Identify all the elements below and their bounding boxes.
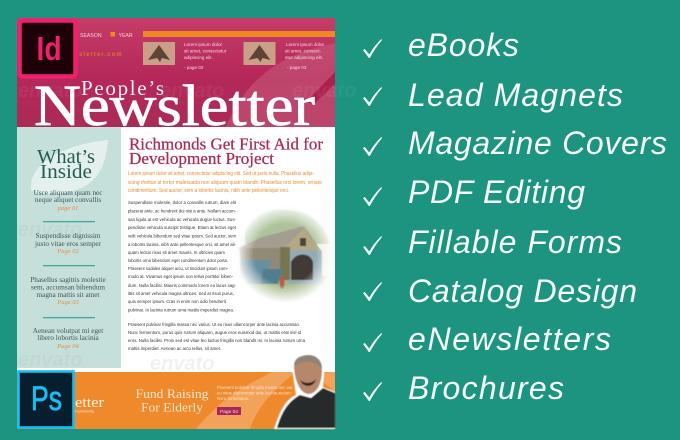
item: Brochures: Brochures xyxy=(408,370,564,406)
article headline: Development Project xyxy=(129,149,274,168)
article body column: san ligula at est vehicula ac vehicula augue luctus. Sus- xyxy=(128,217,236,222)
photo: smiling elderly man xyxy=(274,353,335,429)
footer blurb: Praesent pulvinar fringilla massa nec var. xyxy=(217,385,293,390)
footer headline: For Elderly xyxy=(141,400,204,414)
services checklist xyxy=(363,27,667,406)
footer blurb: eu risus ullamcorper ante lacinia accum xyxy=(217,390,291,396)
thumbnail text 2 xyxy=(285,42,325,70)
article body column: quam lectus risus sit amet mauris. In ultricies quam xyxy=(128,250,225,255)
footer blurb: Nunc fermentum. xyxy=(217,396,249,401)
icon: InDesign badge: Id xyxy=(36,30,62,67)
contents item 1: page 01 xyxy=(57,205,78,212)
article body column: pulvinar. In lacinia rutrum urna mattis imperdiet magna. xyxy=(128,308,234,312)
thumbnail 1 xyxy=(143,42,175,65)
icon: Photoshop badge xyxy=(18,372,74,428)
contents item 2: Page 02 xyxy=(56,248,79,255)
thumbnail text 1: sit amet, consectetur xyxy=(184,48,227,54)
contents item 3: Phasellus sagittis molestie xyxy=(30,276,106,284)
article body column: Suspendisse molestie, dolor a convallis rutrum, diam elit xyxy=(128,200,237,205)
thumbnail 2 xyxy=(244,42,276,65)
thumbnail text 1: Lorem ipsum dolor xyxy=(184,42,223,47)
watermark text on page: envato xyxy=(150,353,214,375)
article body column: placerat ante, ac hendrerit dui nisi a ante. Nullam accum- xyxy=(128,208,236,214)
article body column: modo at. Vivamus eget ipsum non tellus porttitor biben- xyxy=(128,274,233,279)
thumbnail text 2: sit amet, consect- xyxy=(285,48,321,54)
article body column: lobortis urna bibendum eget condimentum dolor porta. xyxy=(128,258,228,263)
watermark text in sidebar: envato xyxy=(18,219,82,241)
contents item 2: justo vitae eros semper xyxy=(34,240,102,248)
masthead subtitle: People’s xyxy=(81,76,164,100)
contents item 3: magna mattis sit amet xyxy=(37,291,99,299)
watermark text in masthead: envato xyxy=(292,80,356,102)
page tag xyxy=(217,407,241,415)
article body column: dum. Nulla facilisi. Mauris commodo lorem eu lacus sag- xyxy=(128,283,236,288)
contents item 2: Suspendisse dignissim xyxy=(36,232,101,240)
sidebar heading xyxy=(37,147,95,183)
season and year label xyxy=(80,32,133,39)
item: eBooks: eBooks xyxy=(408,27,519,63)
season and year label: YEAR xyxy=(118,33,133,39)
article closing paragraph: Praesent pulvinar fringilla massa nec varius. Ut eu risus ullamcorper ante lacinia accumsan. xyxy=(128,322,300,327)
item: Fillable Forms: Fillable Forms xyxy=(408,224,622,260)
article closing paragraph: mattis imperdiet. Aenean ac arcu tellus, sit amet. xyxy=(128,346,221,351)
thumbnail text 1: - page 02 xyxy=(184,65,204,70)
thumbnail text 1 xyxy=(184,42,227,70)
article body column: a lobortis lacinia, nibh ante pellentesque orci, sit amet ali- xyxy=(128,242,236,247)
article intro: condimentum. Sed auctor, sem a lobortis lacinia, nibh ante pellentesque orci. xyxy=(128,188,289,194)
icon: InDesign badge xyxy=(20,20,76,76)
footer headline xyxy=(136,386,209,414)
article body column: Praesent sodales aliquet arcu, ut tincidunt ipsum com- xyxy=(128,266,228,271)
icon: Photoshop badge: Ps xyxy=(31,380,62,418)
watermark text in masthead: envato xyxy=(160,80,224,102)
article body column: quis semper ipsum. Cras in enim non odio hendrerit xyxy=(128,299,227,304)
item: PDF Editing: PDF Editing xyxy=(408,174,585,210)
footer headline: Fund Raising xyxy=(136,386,209,401)
item: Magazine Covers: Magazine Covers xyxy=(408,125,667,161)
panel: orange footer banner xyxy=(17,372,335,429)
article headline xyxy=(129,134,323,168)
article body column: ittis sit amet vehicula magna ultrices. Sed at risus purus, xyxy=(128,291,234,296)
article headline: Richmonds Get First Aid for xyxy=(129,134,323,154)
article body column: pendisse vehicula suscipit tristique. Etiam at lectus eget xyxy=(128,225,237,230)
orange rule xyxy=(143,31,335,37)
article body column xyxy=(128,200,237,312)
item: eNewsletters: eNewsletters xyxy=(408,321,611,357)
masthead title: Newsletter xyxy=(34,73,315,138)
contents item 3 xyxy=(30,276,106,306)
panel: newsletter page xyxy=(17,18,356,429)
contents item 2 xyxy=(34,232,102,255)
item: Catalog Design: Catalog Design xyxy=(408,273,637,309)
item: Lead Magnets: Lead Magnets xyxy=(408,77,623,113)
contents item 1 xyxy=(34,189,102,212)
article intro xyxy=(128,171,322,194)
sidebar heading: What’s xyxy=(37,147,95,168)
footer masthead fragment: etter xyxy=(75,395,104,411)
article body column: velit vehicula bibendum sed vitae ipsum. Sed auctor, sem xyxy=(128,234,236,238)
article intro: scing rhettus at tortor malesuada non aliquam quam blandit. Phasellus orci lorem, ornare xyxy=(128,180,322,186)
thumbnail text 2: Lorem ipsum dolor xyxy=(286,42,325,47)
watermark text in sidebar xyxy=(18,219,82,371)
contents item 4 xyxy=(33,327,103,350)
watermark text in masthead: envato xyxy=(18,80,82,102)
contents item 1: Usce aliquam quam nec xyxy=(34,189,102,197)
thumbnail text 1: adipiscing elit. xyxy=(184,55,213,60)
sidebar heading: Inside xyxy=(40,162,92,183)
footer blurb xyxy=(217,385,293,401)
article closing paragraph: eros. Nulla facilisi. Proin sed est vitae leo luctus fringilla non blandit mi. In lacinia rutrum urna xyxy=(128,338,305,343)
contents item 1: neque aliquet convallis xyxy=(35,196,101,204)
season and year label: SEASON xyxy=(80,33,102,39)
footer masthead fragment: Community xyxy=(75,410,94,414)
contents item 4: Page 04 xyxy=(56,343,79,350)
watermark text in sidebar: envato xyxy=(18,349,82,371)
article intro: Lorem ipsum dolor sit amet, consectetur adipiscing elit. Sed ut justo nulla. Phasellus adipi- xyxy=(128,171,314,177)
contents item 4: libero lobortis lacinia xyxy=(37,334,100,342)
contents item 3: sem, accumsan bibendum xyxy=(31,284,105,292)
panel: magenta masthead xyxy=(17,18,356,138)
page tag: Page 04 xyxy=(220,409,238,415)
article closing paragraph xyxy=(128,322,305,351)
photo: farmhouse xyxy=(238,209,330,302)
website text: sletter.com xyxy=(79,52,123,58)
contents item 4: Aenean volutpat mi eget xyxy=(33,327,103,335)
contents item 3: Page 03 xyxy=(56,299,79,306)
watermark text in masthead xyxy=(18,80,356,102)
thumbnail text 2: - page 03 xyxy=(287,65,307,70)
article closing paragraph: Nunc fermentum, purus quis rutrum aliquam, augue eros euismod dui, ut mattis erat nisl id xyxy=(128,330,301,335)
thumbnail text 2: etur adipiscing elit. xyxy=(285,55,323,60)
panel: what's inside sidebar xyxy=(17,127,121,371)
